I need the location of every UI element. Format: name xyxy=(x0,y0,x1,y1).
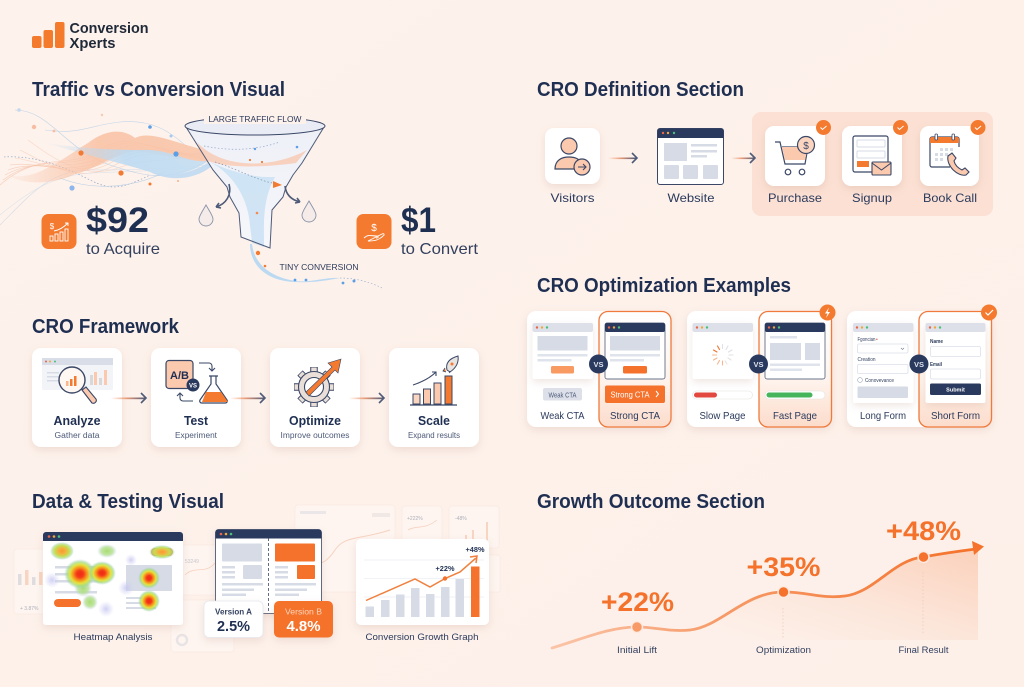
arrow xyxy=(731,153,755,163)
logo wordmark: Xperts xyxy=(70,35,116,52)
example: slow vs fast page: Slow Page xyxy=(700,410,746,422)
badge: VS xyxy=(749,354,768,374)
step: test: Test xyxy=(184,414,209,428)
faded background dashboards: -48% xyxy=(455,516,467,522)
point: final result: Final Result xyxy=(898,645,949,655)
point: initial lift: +22% xyxy=(601,587,674,617)
heading: CRO Optimization Examples: CRO Optimization Examples xyxy=(537,275,791,297)
arrow xyxy=(608,153,637,163)
purchase outcome: Purchase xyxy=(768,191,822,205)
label: large traffic flow: LARGE TRAFFIC FLOW xyxy=(208,114,302,124)
badge: check xyxy=(970,120,986,135)
tag: weak CTA: Weak CTA xyxy=(548,392,577,400)
purchase outcome xyxy=(765,120,831,205)
heatmap window: Heatmap Analysis xyxy=(74,632,153,643)
badge: check xyxy=(981,304,997,320)
website step xyxy=(658,128,724,205)
heading: CRO Definition Section: CRO Definition Section xyxy=(537,79,744,101)
conversion growth graph: +22% xyxy=(436,564,455,573)
mock: short form xyxy=(926,323,986,403)
heading: Growth Outcome Section: Growth Outcome Section xyxy=(537,491,765,513)
mock: short form: Email xyxy=(930,362,943,368)
result: version B: 4.8% xyxy=(286,618,320,635)
step: scale: Expand results xyxy=(408,431,460,440)
faded background dashboards xyxy=(14,505,500,652)
example: slow vs fast page: Fast Page xyxy=(773,410,817,422)
purchase outcome: $ xyxy=(803,141,809,152)
step: analyze xyxy=(32,348,122,447)
result: version A: Version A xyxy=(215,606,252,616)
badge: lightning xyxy=(820,304,836,320)
panel: growth outcome chart xyxy=(552,516,984,655)
mock: long form: Creation xyxy=(858,357,876,363)
badge: check xyxy=(893,120,908,135)
tag: weak CTA xyxy=(543,388,582,400)
area under curve xyxy=(690,549,978,640)
step: optimize xyxy=(270,348,360,447)
heatmap window xyxy=(43,532,183,643)
panel: traffic vs conversion xyxy=(0,108,479,288)
result: version A: 2.5% xyxy=(217,618,250,635)
badge: VS: VS xyxy=(753,360,764,369)
step: optimize: Optimize xyxy=(289,414,341,428)
example: long vs short form xyxy=(847,304,997,427)
step: optimize: Improve outcomes xyxy=(280,431,350,440)
result: version B xyxy=(274,601,333,638)
book call outcome: Book Call xyxy=(923,191,977,205)
badge: VS: VS xyxy=(593,360,604,369)
growth curve xyxy=(552,549,976,648)
stat: $92 to acquire xyxy=(42,201,160,258)
step: test: A/B xyxy=(170,370,189,382)
arrow xyxy=(230,393,265,403)
mock: fast page xyxy=(765,323,825,379)
A/B test window xyxy=(204,530,333,638)
badge: VS xyxy=(589,354,608,374)
progress: fast xyxy=(765,391,825,399)
label: tiny conversion: TINY CONVERSION xyxy=(280,262,358,272)
step: test xyxy=(151,348,241,447)
icon: right droplet xyxy=(285,186,316,222)
badge: VS: VS xyxy=(914,360,924,369)
conversion growth graph: Conversion Growth Graph xyxy=(366,632,478,643)
tag: strong CTA: Strong CTA xyxy=(610,390,650,400)
visitors step xyxy=(545,128,600,205)
mock: weak page xyxy=(532,323,593,379)
example: weak vs strong CTA: Strong CTA xyxy=(610,410,660,422)
faded background dashboards: 53249 xyxy=(185,559,199,565)
mock: long form: • xyxy=(876,337,878,343)
point: initial lift: Initial Lift xyxy=(617,645,658,655)
step: test: VS xyxy=(189,384,197,390)
faded background dashboards: + 3.87% xyxy=(20,606,39,612)
logo wordmark: Conversion xyxy=(70,20,148,37)
arrow xyxy=(111,393,146,403)
website step: Website xyxy=(668,191,715,205)
example: long vs short form: Short Form xyxy=(931,410,980,422)
example: weak vs strong CTA xyxy=(527,311,671,427)
icon: logo bars xyxy=(32,22,64,48)
point: initial lift xyxy=(601,587,674,655)
icon: acquire chart: $ xyxy=(50,222,55,231)
conversion growth graph xyxy=(356,539,489,643)
book call outcome xyxy=(920,120,986,205)
mock: slow page xyxy=(692,323,753,379)
logo wordmark xyxy=(70,20,148,52)
point: optimization: +35% xyxy=(746,552,820,582)
point: optimization: Optimization xyxy=(756,645,811,655)
arrow xyxy=(349,393,384,403)
result: version A xyxy=(204,601,263,638)
mock: long form xyxy=(853,323,914,403)
mock: strong page xyxy=(605,323,665,379)
heading: Traffic vs Conversion Visual: Traffic vs Conversion Visual xyxy=(32,79,285,101)
step: scale xyxy=(389,348,479,447)
step: test: Experiment xyxy=(175,431,218,440)
example: weak vs strong CTA: Weak CTA xyxy=(540,410,584,422)
panel: CRO framework steps xyxy=(32,348,479,447)
stat: $1 to convert xyxy=(356,201,479,258)
point: final result: +48% xyxy=(886,516,961,546)
stat: $92 to acquire: $92 xyxy=(86,201,149,240)
badge: VS xyxy=(910,354,928,374)
mock: long form: Conovevance xyxy=(865,378,894,384)
stat: $1 to convert: $1 xyxy=(401,201,436,240)
stat: $1 to convert: to Convert xyxy=(401,241,479,258)
outcome highlight panel xyxy=(752,112,993,216)
signup outcome: Signup xyxy=(852,191,892,205)
icon: left droplet xyxy=(199,184,230,226)
logo xyxy=(32,20,148,52)
badge: check xyxy=(816,120,831,135)
panel: data and testing xyxy=(14,505,500,652)
step: analyze: Analyze xyxy=(54,414,101,428)
traffic flow waves xyxy=(0,108,307,225)
point: optimization xyxy=(746,552,820,655)
panel: CRO optimization examples xyxy=(527,304,997,427)
step: analyze: Gather data xyxy=(54,431,100,440)
result: version B: Version B xyxy=(285,606,322,616)
visitors step: Visitors xyxy=(550,191,594,205)
point: final result xyxy=(886,516,961,655)
faded background dashboards: +222% xyxy=(407,516,423,522)
mock: short form: Submit xyxy=(946,388,965,394)
conversion growth graph: +48% xyxy=(466,545,485,554)
mock: long form: Fgoncian xyxy=(858,337,876,343)
stat: $92 to acquire: to Acquire xyxy=(86,241,160,258)
panel: CRO definition flow xyxy=(545,112,993,216)
example: slow vs fast page xyxy=(687,304,836,427)
heading: CRO Framework: CRO Framework xyxy=(32,316,180,338)
icon: convert hand: $ xyxy=(371,223,377,234)
funnel xyxy=(185,117,382,288)
step: scale: Scale xyxy=(418,414,450,428)
tag: strong CTA xyxy=(605,386,665,403)
example: long vs short form: Long Form xyxy=(860,410,906,422)
mock: short form: Name xyxy=(930,339,943,345)
heading: Data & Testing Visual: Data & Testing Visual xyxy=(32,491,224,513)
progress: slow xyxy=(692,391,752,399)
arrow head xyxy=(972,541,984,555)
signup outcome xyxy=(842,120,908,205)
